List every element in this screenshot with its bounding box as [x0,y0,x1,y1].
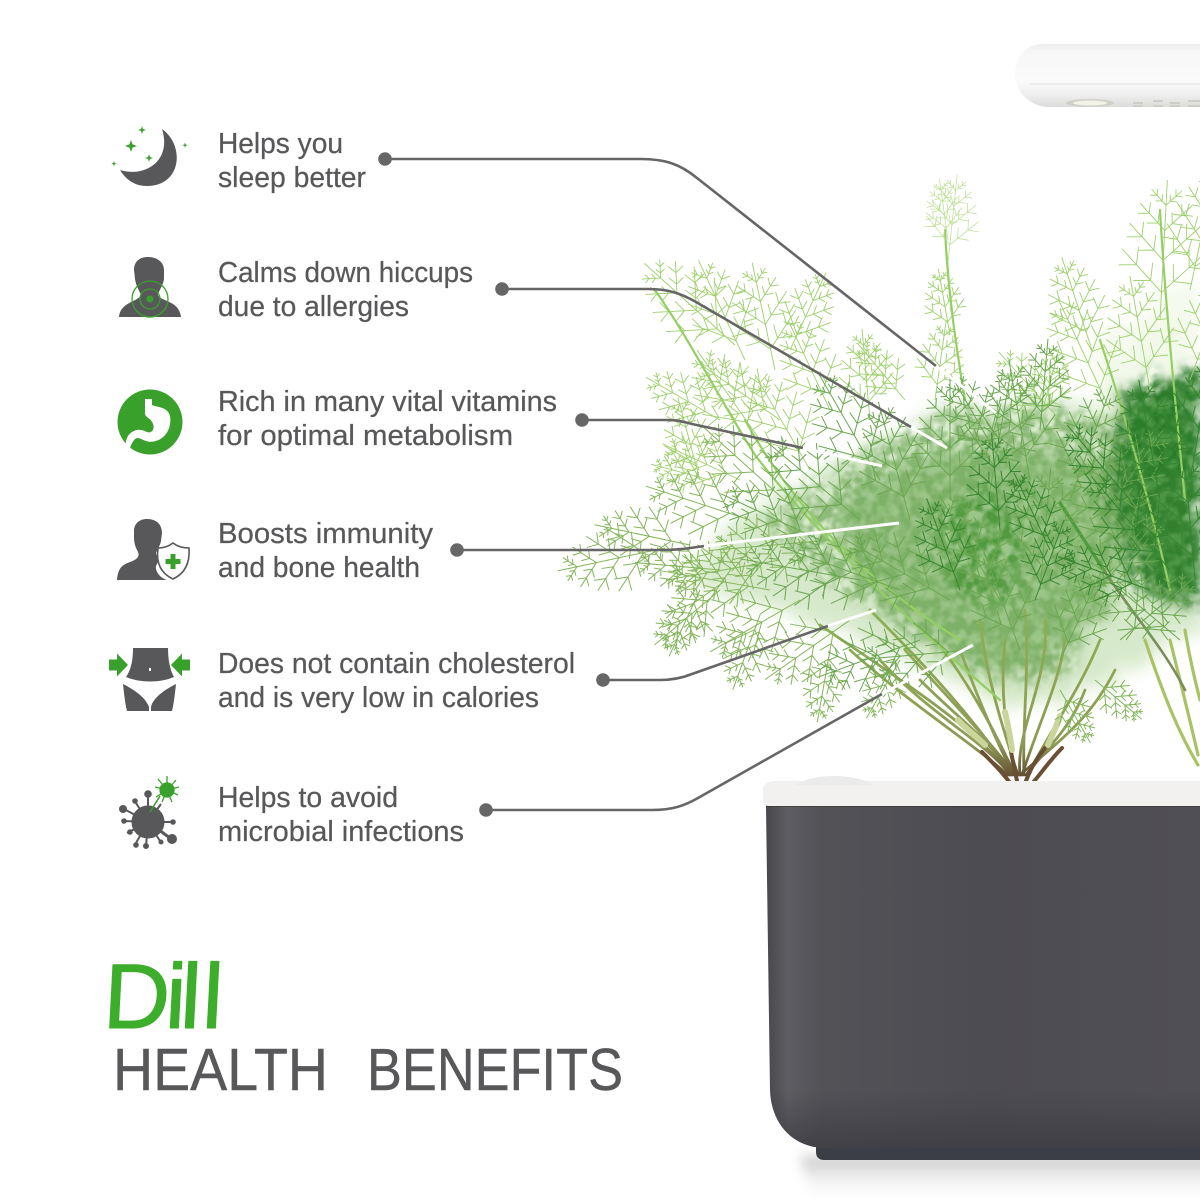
soft foliage base [690,280,1200,710]
icon: viruses [120,776,179,848]
connector: sleep [378,152,996,413]
left reaching fronds [550,401,1154,752]
pot body [766,806,1200,1148]
text: helps you sleep better [218,128,366,194]
subtitle: health benefits: HEALTH [113,1037,328,1103]
dill plant [550,163,1200,786]
text: helps avoid infections: microbial infections [218,816,464,848]
icon: moon and stars [111,126,188,186]
stems [655,210,1200,786]
pot rim [763,781,1200,806]
text: helps avoid infections [218,782,464,848]
text: boosts immunity: and bone health [218,552,420,584]
mottled foliage mass [760,365,1200,680]
text: rich in vitamins: Rich in many vital vitamins [218,386,557,418]
icon: waist with arrows [109,648,190,711]
text: no cholesterol: and is very low in calories [218,682,539,714]
pot shadow [800,1156,1200,1196]
connector: vitamins [575,413,882,466]
rim knob [795,776,874,785]
text: calms down hiccups: Calms down hiccups [218,257,473,289]
text: helps you sleep better: sleep better [218,162,366,194]
text: rich in vitamins: for optimal metabolism [218,420,513,452]
callout: sleep [111,126,366,194]
grow lamp [1015,44,1200,107]
callout: immunity [117,518,434,584]
connector: cholesterol [596,610,876,687]
light fronds [619,163,1200,504]
text: helps avoid infections: Helps to avoid [218,782,398,814]
mid fronds [706,336,1200,710]
text: calms down hiccups [218,257,473,323]
title: Dill: Dill [101,945,226,1048]
thin top flower spray [921,172,984,265]
connector: immunity [450,523,899,557]
text: rich in vitamins [218,386,557,452]
icon: person with shield [117,519,189,580]
subtitle: health benefits: BENEFITS [367,1037,623,1103]
dark fronds [898,353,1200,619]
callout: infections [120,776,464,848]
connector: hiccups [495,282,947,448]
callout: vitamins [118,386,557,454]
icon: person with neck target [119,257,181,317]
icon: stomach [118,390,182,454]
text: no cholesterol: Does not contain cholesterol [218,648,575,680]
subtitle: health benefits [113,1037,623,1103]
text: no cholesterol [218,648,575,714]
pot foot [816,1140,1200,1160]
connector: infections [479,645,973,817]
text: helps you sleep better: Helps you [218,128,343,160]
callout: hiccups [119,257,473,323]
text: calms down hiccups: due to allergies [218,291,409,323]
callout: cholesterol [109,648,575,714]
planter pot [763,776,1200,1196]
text: boosts immunity: Boosts immunity [218,518,434,550]
text: boosts immunity [218,518,434,584]
